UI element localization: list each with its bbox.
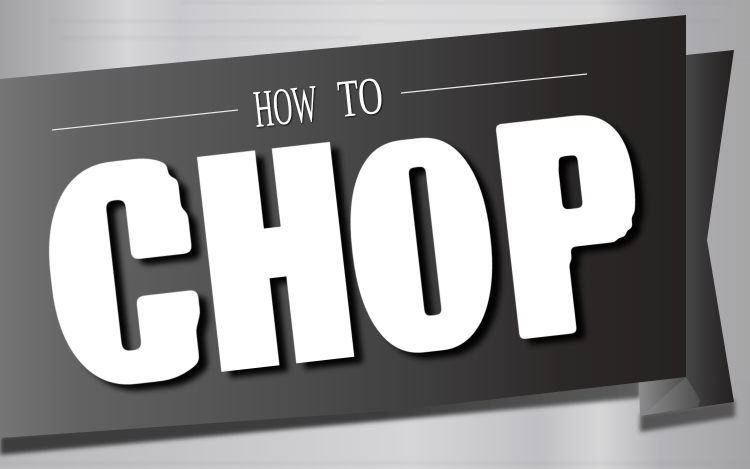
subtitle: how to: HOW	[251, 75, 321, 140]
subtitle rule right	[401, 74, 587, 93]
title: chop: C	[37, 111, 207, 447]
ribbon fold	[639, 377, 700, 416]
title: chop: P	[485, 59, 652, 402]
subtitle rule left	[52, 110, 238, 130]
subtitle: how to: TO	[335, 65, 386, 129]
title: chop: H	[190, 92, 362, 434]
title: chop: O	[337, 74, 506, 417]
subtitle: how to	[251, 65, 386, 140]
title: chop	[37, 59, 652, 447]
